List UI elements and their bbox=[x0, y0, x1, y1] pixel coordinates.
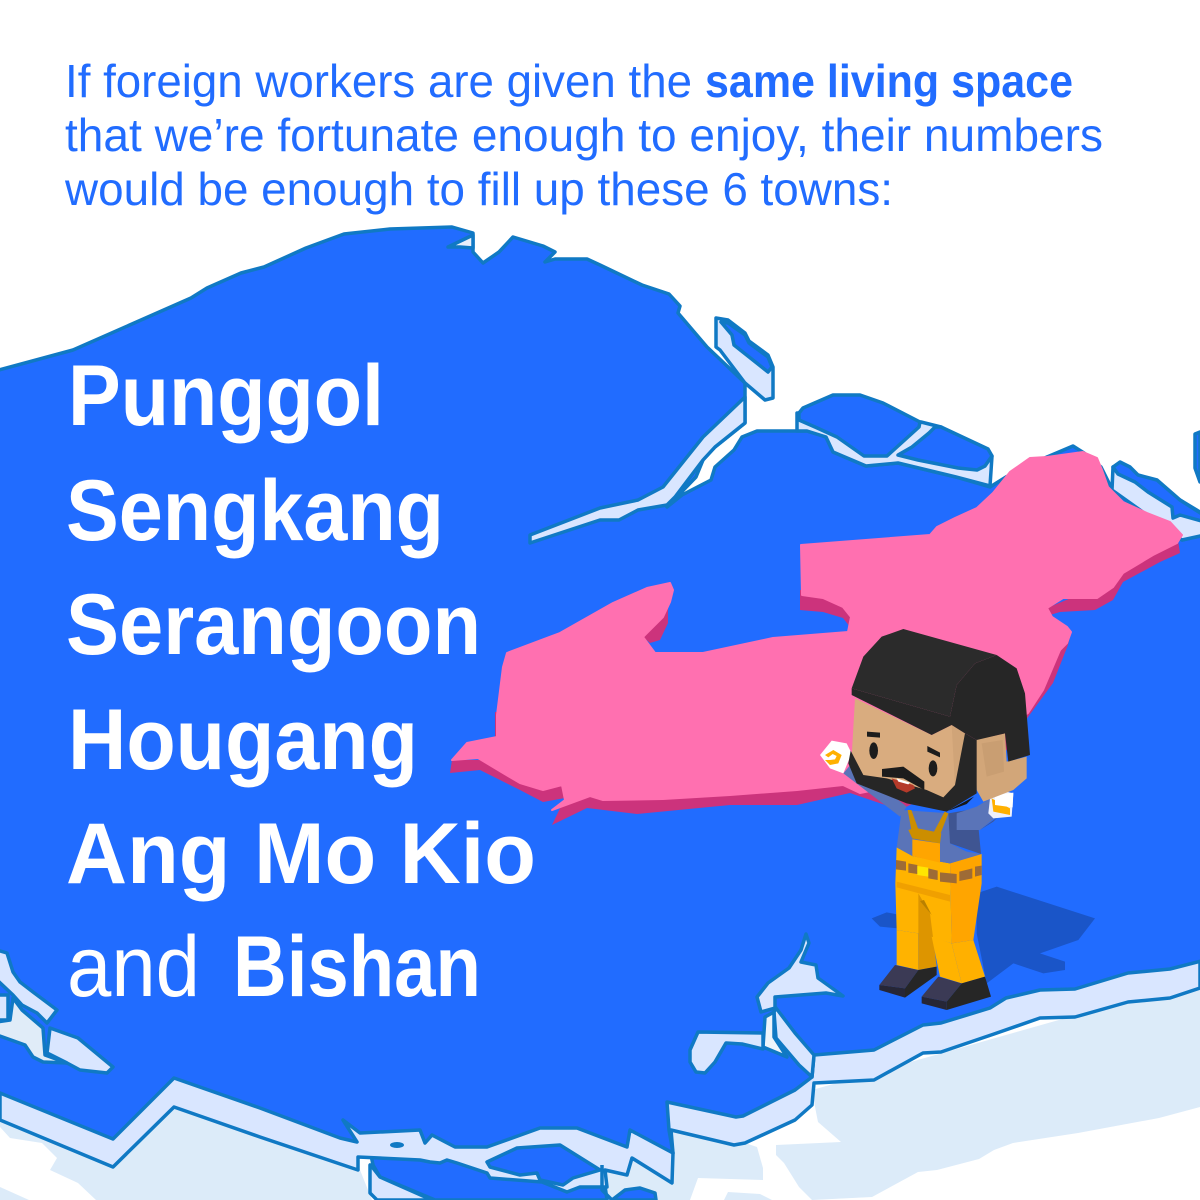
ground shadow bbox=[872, 887, 1095, 983]
chin shade bbox=[948, 797, 974, 811]
lagoon islet bbox=[390, 1142, 404, 1148]
moustache bbox=[882, 767, 924, 790]
inlet arm bbox=[690, 1032, 763, 1073]
region side wall bbox=[450, 540, 1180, 825]
towns list: Ang Mo Kio bbox=[66, 806, 536, 902]
main island bbox=[0, 227, 1200, 1153]
overalls bib and straps bbox=[908, 810, 948, 863]
southern island shore bbox=[370, 1165, 432, 1200]
head bbox=[848, 629, 1030, 812]
small southern islet bbox=[612, 1188, 656, 1200]
river strip bbox=[530, 397, 745, 543]
side of face bbox=[952, 725, 967, 787]
north notch bbox=[448, 235, 473, 248]
inlet channel bbox=[774, 1008, 814, 1077]
highlighted towns region bbox=[450, 452, 1182, 825]
northwest island bbox=[716, 318, 773, 400]
heading: that we’re fortunate enough to enjoy, their numbers bbox=[65, 109, 1103, 161]
towns list: Punggol bbox=[68, 348, 384, 444]
eastern island bbox=[1112, 462, 1200, 540]
left arm and hand bbox=[820, 741, 907, 817]
coastal wall bbox=[0, 950, 1200, 1192]
shirt bbox=[897, 797, 998, 863]
teeth bbox=[897, 778, 910, 784]
heading bbox=[64, 55, 1103, 215]
heading: same living space bbox=[705, 55, 1073, 107]
northeast islands bbox=[797, 395, 992, 486]
mouth bbox=[892, 778, 915, 793]
belt bbox=[896, 860, 982, 883]
inlet sliver bbox=[763, 1012, 787, 1057]
right islet far edge bbox=[1195, 432, 1200, 482]
region top surface bbox=[452, 452, 1182, 810]
ear bbox=[982, 740, 1004, 777]
towns list: Hougang bbox=[68, 692, 418, 788]
right hand bbox=[988, 788, 1013, 818]
towns list: Bishan bbox=[233, 919, 481, 1015]
towns list bbox=[66, 348, 536, 1015]
eyes bbox=[869, 742, 937, 776]
towns list: and bbox=[67, 919, 200, 1015]
neck and ear side bbox=[975, 733, 1027, 802]
hair top bbox=[852, 629, 997, 717]
beard bbox=[848, 733, 977, 812]
shoes bbox=[879, 965, 991, 1010]
southern inlet bbox=[757, 934, 843, 1012]
towns list: Serangoon bbox=[66, 577, 481, 673]
southern island bbox=[370, 1150, 607, 1200]
surrounding water bbox=[0, 980, 1200, 1200]
trousers and legs bbox=[895, 847, 985, 983]
lagoon bbox=[487, 1145, 600, 1185]
southwest shore line bbox=[602, 1165, 612, 1200]
face bbox=[852, 698, 967, 798]
worker character bbox=[820, 629, 1095, 1010]
towns list: Sengkang bbox=[66, 463, 444, 559]
heading: If foreign workers are given the bbox=[65, 55, 692, 107]
heading: would be enough to fill up these 6 towns: bbox=[64, 163, 893, 215]
hair side bbox=[852, 655, 1030, 762]
eyebrows bbox=[867, 732, 940, 757]
western islets bbox=[0, 950, 113, 1073]
